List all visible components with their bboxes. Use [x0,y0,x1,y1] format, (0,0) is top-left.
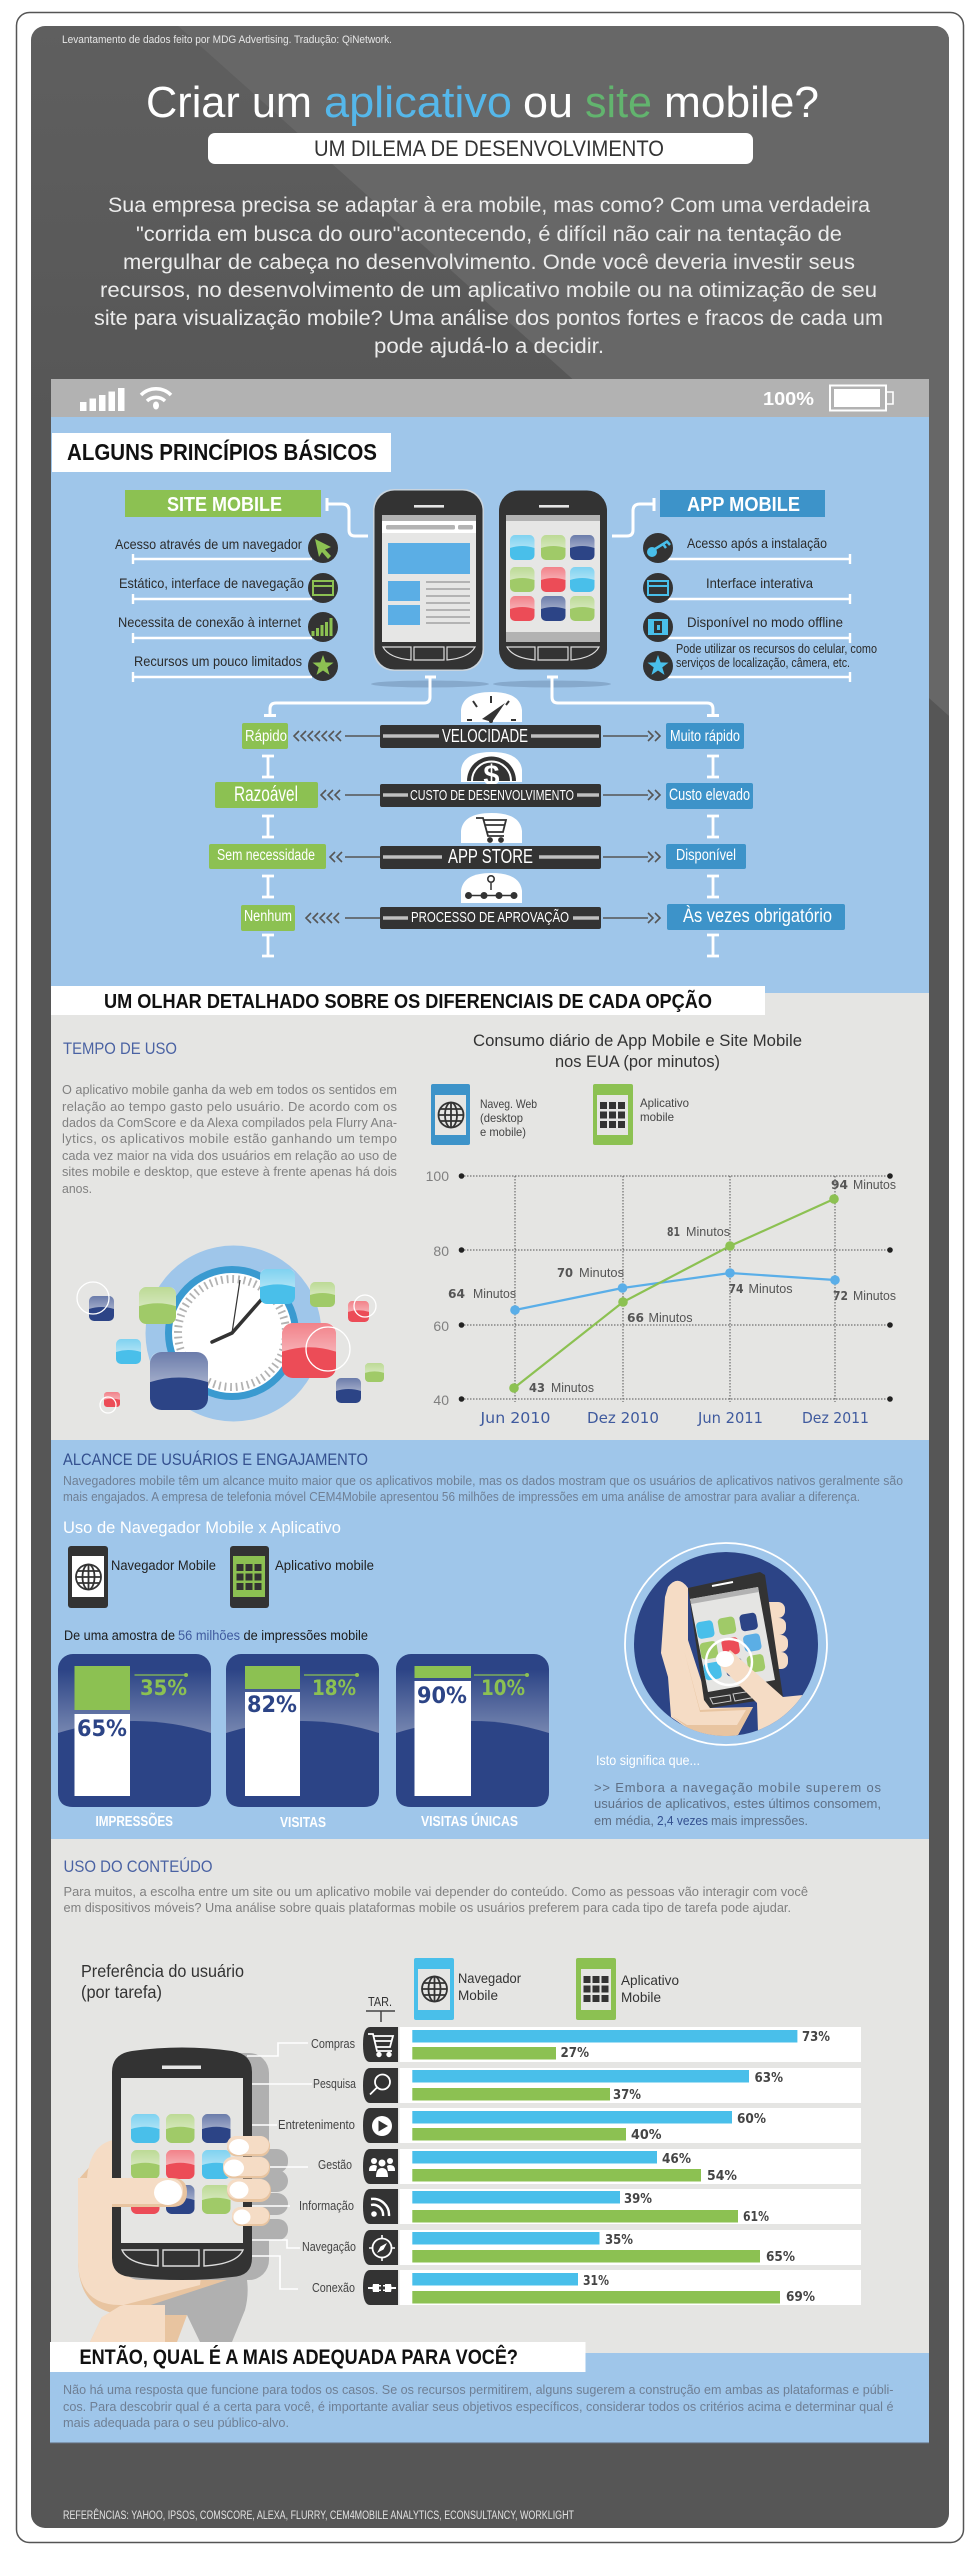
line chart: 100 [426,1168,449,1184]
line chart: 81 [667,1224,680,1239]
title: ou [523,78,573,127]
text: callout body: 2,4 vezes [657,1813,708,1828]
text: callout body: mais impressões. [711,1813,808,1828]
card: visitas únicas: 90% [417,1684,467,1709]
legend: web: Naveg. Web [480,1097,537,1111]
row: pesquisa [313,2068,861,2103]
bar: custo de desenvolvimento [380,784,601,807]
intro paragraph: recursos, no desenvolvimento de um aplicativo mobile ou na otimização de seu [100,278,877,302]
line chart: 43 [529,1380,545,1395]
legend: app: Aplicativo [640,1096,689,1110]
legend: app: mobile [640,1110,674,1124]
label: custo elevado: Custo elevado [669,785,750,804]
icon: compass [369,2235,395,2261]
phone: site mobile [371,489,489,688]
text: uso do conteúdo body: em dispositivos móveis? Uma análise sobre quais plataformas mobile os usuários preferem para cada tipo de tarefa pode ajudar. [64,1900,791,1915]
app mobile feature list: Disponível no modo offline [687,614,843,630]
line chart: 70 [557,1265,573,1280]
row: pesquisa: Pesquisa [313,2076,357,2091]
intro paragraph: Sua empresa precisa se adaptar à era mobile, mas como? Com uma verdadeira [108,193,870,217]
text: tempo de uso body: lytics, os aplicativos mobile estão ganhando um tempo [62,1131,397,1146]
bar: processo de aprovação [380,907,601,929]
legend: navegador mobile [68,1546,216,1608]
line chart: 74 [728,1281,744,1296]
label: nenhum: Nenhum [244,908,292,925]
line chart: Jun 2011 [697,1409,763,1427]
row: conexão [312,2270,861,2305]
app mobile feature list: Pode utilizar os recursos do celular, como [676,642,877,656]
icon: cost [461,752,522,792]
connector beams [262,755,719,957]
line chart: Dez 2011 [802,1409,869,1427]
arrow: left [330,852,380,862]
text: conclusão body: mais adequada para o seu público-alvo. [63,2415,289,2430]
illustration: clock with apps [77,1246,384,1422]
card: impressões: 65% [77,1717,127,1742]
chart title: nos EUA (por minutos) [555,1053,720,1071]
line chart: Dez 2010 [587,1409,659,1427]
line chart: 80 [433,1243,449,1259]
icon: signal [308,612,338,642]
text: callout body: usuários de aplicativos, estes últimos consomem, [594,1796,881,1811]
legend: web: e mobile) [480,1125,526,1139]
card: visitas únicas [396,1654,549,1830]
row: entretenimento: 40% [631,2128,662,2143]
text: tempo de uso body: sites mobile e desktop, que esteve à frente apenas há dois [62,1164,397,1179]
row: conexão: Conexão [312,2280,355,2295]
line chart: 94 [831,1177,848,1192]
text: alcance body: mais engajados. A empresa de telefonia móvel CEM4Mobile apresentou 56 milhões de impressões em uma análise de amostrar para avaliar a diferença. [63,1489,860,1504]
row: pesquisa: 37% [613,2088,641,2103]
legend: aplicativo mobile: Mobile [621,1989,661,2005]
app mobile feature list [643,533,877,682]
card: visitas: 82% [247,1693,297,1718]
panel: uso do conteúdo [51,1839,929,2353]
arrow: left [294,731,380,741]
line chart: Minutos [579,1266,624,1280]
row: gestão [318,2149,861,2184]
line chart: 66 [627,1310,644,1325]
text: uso do conteúdo body: Para muitos, a escolha entre um site ou um aplicativo mobile vai depender do conteúdo. Como as pessoas vão interagir com você [64,1884,808,1899]
site mobile feature list [115,533,338,682]
icon: cart [368,2034,393,2056]
line chart: Minutos [648,1311,692,1325]
row: entretenimento: 60% [737,2112,766,2127]
title: aplicativo [324,78,512,127]
intro paragraph: mergulhar de cabeça no desenvolvimento. Onde você deveria investir seus [123,250,855,274]
references: REFERÊNCIAS: YAHOO, IPSOS, COMSCORE, ALEXA, FLURRY, CEM4MOBILE ANALYTICS, ECONSULTANCY, WORKLIGHT [63,2509,574,2522]
icon: plug [368,2284,396,2292]
line chart: Minutos [748,1282,792,1296]
label: às vezes obrigatório: Às vezes obrigatório [683,904,832,927]
arrow: left [306,913,380,923]
card: visitas [226,1654,379,1831]
bar: processo de aprovação: PROCESSO DE APROVAÇÃO [411,909,569,926]
heading: então qual é a mais adequada: ENTÃO, QUAL É A MAIS ADEQUADA PARA VOCÊ? [80,2344,518,2369]
chart title: preferência: Preferência do usuário [81,1961,244,1981]
column label: tar. [366,1994,395,2022]
row: compras: 73% [802,2030,830,2045]
row: informação: 61% [743,2210,769,2225]
icon: signal bars [80,388,124,411]
row: navegação [302,2230,861,2265]
chart title: preferência: (por tarefa) [81,1982,162,2002]
text: callout body [594,1780,882,1828]
icon: cart [461,813,522,843]
heading: uso do conteúdo: USO DO CONTEÚDO [64,1857,212,1876]
line chart: Minutos [853,1289,896,1303]
icon: play [372,2116,392,2136]
arrow: right [603,852,660,862]
icon: cost: $ [483,760,500,792]
row: gestão: 54% [707,2169,737,2184]
text: conclusão body: Não há uma resposta que funcione para todos os casos. Se os recursos permitirem, alguns sugerem a construção em ambas as plataformas e públi- [63,2382,894,2397]
comparison: custo [215,752,753,809]
text: alcance body: Navegadores mobile têm um alcance muito maior que os aplicativos mobile, mas os dados mostram que os usuários de aplicativos nativos geralmente são [63,1473,903,1488]
column label: tar.: TAR. [368,1994,392,2009]
row: conexão: 31% [583,2274,609,2289]
legend: web [431,1084,537,1145]
site mobile label [125,490,321,517]
icon: approval tree [461,873,522,903]
icon: interface window [643,573,673,603]
icon: key [643,533,673,563]
row: entretenimento: Entretenimento [278,2117,355,2132]
card: visitas únicas: 10% [481,1676,525,1700]
chart title: preferência [81,1961,244,2002]
illustration: hand holding phone [78,2048,288,2342]
row: compras [311,2027,861,2062]
card: visitas: VISITAS [280,1815,326,1831]
text: alcance body [63,1473,903,1504]
arrow: right [603,731,660,741]
legend: aplicativo mobile: Aplicativo [621,1972,679,1988]
icon: speedometer [461,692,522,723]
intro paragraph [94,193,883,358]
site mobile label: SITE MOBILE [167,494,282,516]
line chart: Minutos [551,1381,594,1395]
icon: wifi [141,389,171,410]
bar: velocidade: VELOCIDADE [442,726,528,746]
bar: velocidade [380,725,601,748]
row: pesquisa: 63% [754,2071,783,2086]
text: tempo de uso body [62,1082,398,1196]
row: navegação: Navegação [302,2239,356,2254]
legend: aplicativo mobile [576,1958,679,2020]
site mobile feature list: Acesso através de um navegador [115,536,302,552]
site mobile feature list: Recursos um pouco limitados [134,653,302,669]
card: visitas únicas: VISITAS ÚNICAS [421,1812,518,1830]
card: impressões: 35% [140,1676,187,1700]
text: tempo de uso body: cada vez maior na vida dos usuários em relação ao uso de [62,1148,397,1163]
card: visitas: 18% [312,1676,356,1700]
text: conclusão body: cos. Para descobrir qual é a certa para você, é importante avaliar seus objetivos específicos, considerar todos os critérios acima e determinar qual é [63,2399,894,2414]
panel: alcance e engajamento [51,1440,929,1839]
app mobile feature list: Acesso após a instalação [687,535,827,551]
connectors to phones [327,498,654,536]
legend: app [593,1084,689,1145]
panel: conclusão [50,2342,929,2443]
chart title: Consumo diário de App Mobile e Site Mobile [473,1032,802,1050]
label: rápido: Rápido [245,728,287,745]
line chart: Minutos [473,1287,516,1301]
legend: navegador mobile: Navegador [458,1970,521,1986]
text: callout body: >> Embora a navegação mobile superem os [594,1780,882,1795]
card: impressões [58,1654,211,1830]
icon: rss [371,2199,389,2217]
line chart: 40 [433,1392,449,1408]
arrow: right [603,790,660,800]
phone: app mobile [493,490,611,688]
row: navegação: 65% [766,2250,795,2265]
line chart: 72 [833,1288,848,1303]
row: gestão: Gestão [318,2157,352,2172]
text: tempo de uso body: O aplicativo mobile ganha da web em todos os sentidos em [62,1082,397,1097]
row: conexão: 69% [786,2290,815,2305]
label: disponível: Disponível [676,847,736,864]
illustration: hand tapping phone [625,1543,827,1745]
icon: star [308,651,338,681]
line chart: Jun 2010 [479,1409,550,1427]
label: muito rápido: Muito rápido [670,728,740,745]
label: rápido [242,723,288,749]
row: informação [299,2189,861,2225]
phone status bar [51,379,929,417]
subtitle pill [208,133,753,164]
row: navegação: 35% [605,2233,633,2248]
callout: isto significa: Isto significa que... [596,1752,700,1768]
line chart: 60 [433,1318,449,1334]
chart title [473,1032,802,1071]
line chart: Minutos [853,1178,896,1192]
comparison: processo de aprovação [241,873,845,931]
intro paragraph: site para visualização mobile? Uma análise dos pontos fortes e fracos de cada um [94,306,883,330]
title: site [585,78,652,127]
text: uso do conteúdo body [64,1884,808,1915]
text: callout body: em média, [594,1813,654,1828]
heading: alguns princípios básicos [52,433,391,472]
label: sem necessidade: Sem necessidade [217,847,315,864]
subheading: uso de navegador: Uso de Navegador Mobile x Aplicativo [63,1518,341,1537]
title: Criar um [146,78,312,127]
legend: web: (desktop [480,1111,523,1125]
title: mobile? [664,78,819,127]
arrow: left [321,790,380,800]
icon: battery [830,386,893,410]
legend: navegador mobile [414,1958,521,2020]
app mobile feature list: serviços de localização, câmera, etc. [676,656,850,670]
connectors to comparison [264,677,719,716]
icon: search [370,2074,390,2094]
panel: princípios básicos [51,417,929,995]
heading: alguns princípios básicos: ALGUNS PRINCÍPIOS BÁSICOS [67,438,377,465]
icon: cursor [308,533,338,563]
heading: um olhar detalhado: UM OLHAR DETALHADO SOBRE OS DIFERENCIAIS DE CADA OPÇÃO [104,990,712,1013]
intro paragraph: pode ajudá-lo a decidir. [374,334,604,358]
subtitle pill: UM DILEMA DE DESENVOLVIMENTO [314,136,664,161]
text: conclusão body [63,2382,894,2430]
row: entretenimento [278,2108,861,2143]
task connector lines [247,2043,312,2289]
intro paragraph: "corrida em busca do ouro"acontecendo, é difícil não cair na tentação de [136,222,842,246]
sample caption: de impressões mobile [244,1628,368,1643]
sample caption: De uma amostra de [64,1628,175,1643]
app mobile label [660,490,825,517]
panel: tempo de uso [51,986,929,1440]
label: razoável: Razoável [234,783,298,806]
app mobile feature list: Interface interativa [706,575,813,591]
sample caption: 56 milhões [178,1628,240,1643]
icon: browser window [308,573,338,603]
legend: navegador mobile: Mobile [458,1987,498,2003]
legend: aplicativo mobile [230,1546,374,1608]
row: compras: 27% [560,2046,589,2061]
text: tempo de uso body: relação ao tempo gasto pelo usuário. De acordo com os [62,1099,398,1114]
arrow: right [603,913,660,923]
comparison: app store [209,813,746,869]
bar: custo de desenvolvimento: CUSTO DE DESENVOLVIMENTO [410,787,574,804]
heading: um olhar detalhado [51,986,765,1015]
icon: offline film [643,612,673,642]
line chart: Minutos [686,1225,730,1239]
line chart: 64 [448,1286,465,1301]
heading: tempo de uso: TEMPO DE USO [63,1039,177,1058]
row: informação: 39% [624,2192,652,2207]
line chart [426,1168,896,1427]
comparison: velocidade [242,692,744,749]
title [146,78,819,127]
legend: navegador mobile: Navegador Mobile [111,1558,216,1573]
sample caption [64,1628,368,1643]
card: impressões: IMPRESSÕES [96,1812,173,1830]
row: gestão: 46% [662,2152,691,2167]
row: compras: Compras [311,2036,355,2051]
app mobile label: APP MOBILE [687,494,800,516]
label: custo elevado [666,783,753,809]
site mobile feature list: Estático, interface de navegação [119,575,304,591]
heading: alcance: ALCANCE DE USUÁRIOS E ENGAJAMENTO [63,1450,368,1469]
text: tempo de uso body: dados da ComScore e da Alexa compilados pela Flurry Ana- [62,1115,397,1130]
text: tempo de uso body: anos. [62,1181,92,1196]
label: sem necessidade [209,844,326,869]
bar: app store [380,846,601,869]
icon: people [369,2158,395,2177]
source credit: Levantamento de dados feito por MDG Advertising. Tradução: QiNetwork. [62,34,392,46]
legend: aplicativo mobile: Aplicativo mobile [275,1558,374,1573]
label: nenhum [241,905,295,931]
site mobile feature list: Necessita de conexão à internet [118,614,301,630]
label: disponível [666,844,746,869]
battery percentage: 100% [763,389,814,409]
label: muito rápido [666,723,744,749]
row: informação: Informação [299,2198,354,2213]
bar: app store: APP STORE [448,846,533,868]
icon: cell star [643,651,673,681]
